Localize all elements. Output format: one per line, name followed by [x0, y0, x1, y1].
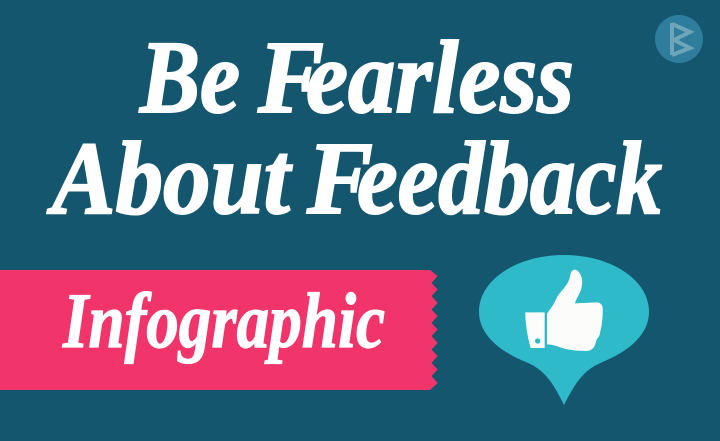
title: F: [257, 20, 324, 135]
speech bubble with thumbs up: [479, 255, 649, 405]
title: earless: [306, 20, 574, 135]
cuff button: [535, 338, 540, 344]
icon: thumbs up: [525, 270, 603, 351]
ribbon banner: [0, 270, 438, 390]
logo badge: [655, 15, 703, 63]
title: Be: [139, 20, 240, 135]
title: eedback: [357, 121, 662, 236]
title: F: [306, 121, 373, 236]
ribbon label: Infographic: [62, 277, 385, 364]
title: [47, 20, 662, 236]
title: About: [47, 121, 293, 236]
